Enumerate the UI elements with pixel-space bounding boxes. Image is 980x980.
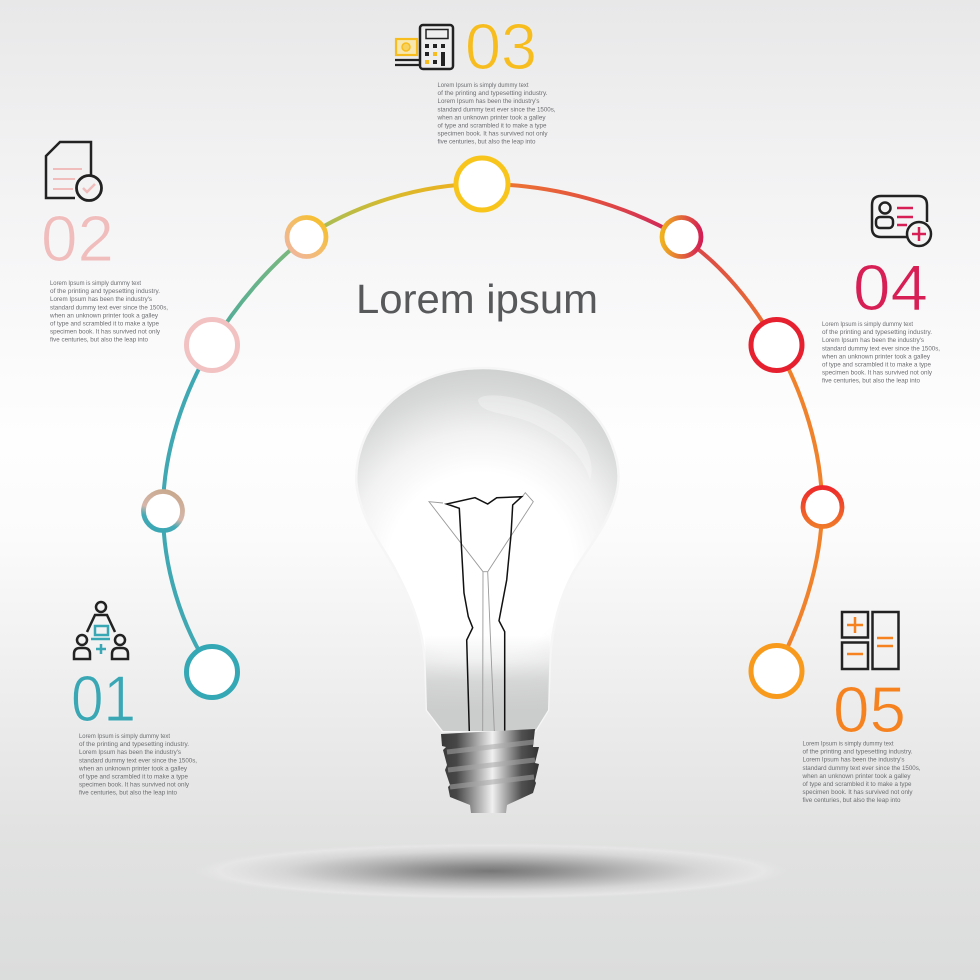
text block 02: when an unknown printer took a galley: [49, 312, 159, 319]
text block 04: specimen book. It has survived not only: [822, 370, 933, 377]
title: Lorem ipsum: [356, 276, 598, 322]
number 02: 02: [41, 202, 114, 275]
text block 02: Lorem Ipsum has been the industry's: [50, 296, 152, 303]
text block 01: specimen book. It has survived not only: [79, 782, 190, 789]
text block 04: standard dummy text ever since the 1500s,: [822, 345, 940, 352]
text block 05: Lorem Ipsum is simply dummy text: [802, 740, 894, 748]
bulb highlight: [478, 395, 592, 480]
text block 01: of type and scrambled it to make a type: [79, 774, 188, 780]
text block 03: specimen book. It has survived not only: [438, 131, 548, 138]
text block 01: [78, 733, 197, 797]
bulb neck shading: [425, 635, 550, 731]
filament: [447, 497, 522, 731]
text block 05: [801, 740, 921, 804]
text block 02: specimen book. It has survived not only: [50, 329, 161, 336]
number 05: 05: [833, 673, 906, 746]
text block 01: when an unknown printer took a galley: [78, 765, 188, 772]
number 04: 04: [853, 251, 928, 324]
text block 03: standard dummy text ever since the 1500s,: [438, 106, 556, 113]
icon: math operators: [842, 612, 898, 669]
number 03: 03: [465, 10, 537, 83]
bulb glass: [356, 368, 619, 731]
text block 01: five centuries, but also the leap into: [79, 790, 177, 797]
text block 03: when an unknown printer took a galley: [436, 114, 546, 121]
text block 05: standard dummy text ever since the 1500s,: [802, 765, 921, 772]
text block 04: when an unknown printer took a galley: [821, 353, 931, 360]
text block 04: Lorem Ipsum is simply dummy text: [822, 321, 913, 328]
text block 04: of type and scrambled it to make a type: [822, 362, 931, 368]
text block 04: five centuries, but also the leap into: [822, 378, 920, 385]
icon: document check: [46, 142, 102, 200]
text block 02: of type and scrambled it to make a type: [50, 320, 159, 328]
text block 03: [436, 82, 556, 146]
number 01: 01: [71, 662, 136, 735]
text block 04: of the printing and typesetting industry.: [822, 329, 932, 336]
arc connector: [163, 184, 822, 672]
light bulb: [356, 368, 619, 813]
text block 03: Lorem Ipsum is simply dummy text: [438, 82, 529, 89]
text block 03: Lorem Ipsum has been the industry's: [438, 98, 540, 105]
filament supports: [429, 493, 533, 731]
text block 05: of type and scrambled it to make a type: [802, 781, 912, 788]
arc nodes: [144, 158, 842, 698]
screw base: [441, 729, 539, 813]
text block 01: Lorem Ipsum is simply dummy text: [79, 733, 170, 740]
text block 03: five centuries, but also the leap into: [438, 139, 536, 146]
text block 05: of the printing and typesetting industry.: [802, 749, 913, 756]
text block 02: [49, 280, 168, 344]
text block 03: of the printing and typesetting industry.: [438, 90, 548, 97]
text block 04: Lorem Ipsum has been the industry's: [822, 337, 924, 344]
text block 05: when an unknown printer took a galley: [801, 773, 911, 780]
text block 05: five centuries, but also the leap into: [802, 797, 901, 804]
text block 01: of the printing and typesetting industry.: [79, 741, 189, 748]
bulb ground shadow: [195, 843, 787, 899]
text block 01: Lorem Ipsum has been the industry's: [79, 749, 181, 756]
text block 03: of type and scrambled it to make a type: [438, 122, 547, 130]
text block 01: standard dummy text ever since the 1500s,: [79, 757, 197, 764]
text block 04: [821, 321, 940, 385]
text block 02: of the printing and typesetting industry.: [50, 288, 160, 295]
icon: team: [74, 602, 128, 659]
text block 02: Lorem Ipsum is simply dummy text: [50, 280, 141, 287]
icon: calculator and cash: [395, 25, 453, 69]
text block 05: Lorem Ipsum has been the industry's: [802, 757, 904, 764]
screw threads: [447, 742, 535, 787]
text block 05: specimen book. It has survived not only: [802, 789, 913, 796]
text block 02: five centuries, but also the leap into: [50, 337, 148, 344]
icon: profile card add: [872, 196, 931, 246]
text block 02: standard dummy text ever since the 1500s,: [50, 304, 168, 311]
